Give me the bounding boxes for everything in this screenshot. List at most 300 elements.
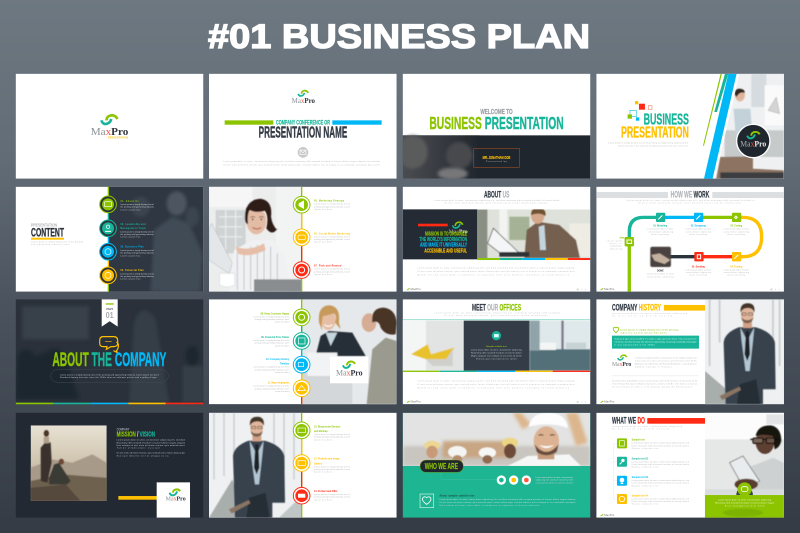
labels: 05. Sending [692, 266, 705, 268]
heading: MISSION / VISION [117, 432, 155, 439]
item 3: the printing and typesetting industry [120, 252, 154, 255]
item 12: Lorem ipsum is simply dummy text of [314, 433, 350, 436]
item 13: Ipsum has been [314, 472, 332, 474]
photo: woman [209, 187, 302, 292]
item 1: Lorem ipsum has [120, 208, 140, 211]
body text: Nonummy nibh euismod tincidunt ut laoreet dolore magna aliquam [117, 441, 185, 444]
service 1: Lorem ipsum dolor sit amet, consectetuer adipiscing elit, sed [632, 442, 689, 445]
item 6: Lorem ipsum is simply dummy text of [314, 235, 350, 238]
photo [713, 74, 784, 179]
icon: speech bubbles [100, 337, 118, 353]
item 4 [120, 269, 154, 281]
labels: consectetuer [610, 245, 623, 248]
labels: 04. Testing [730, 265, 743, 268]
labels: Lorem ipsum dolor sit amet [724, 268, 749, 271]
presenter box: MR. JONATHAN DOE [483, 155, 510, 160]
intro text: Ut wisi enim ad minim veniam, quis nostrud exerci tation ullamcorper [444, 314, 548, 317]
intro text [612, 312, 687, 317]
photo: hikers [31, 425, 107, 501]
item 3: Lorem ipsum is simply dummy text of [120, 249, 154, 252]
process path [629, 217, 762, 292]
labels: diam nonummy [727, 275, 745, 277]
logo badge [737, 124, 770, 158]
item 14: Lorem ipsum is simply dummy text of [314, 493, 350, 496]
logo text: Sydney College in Virginia [635, 365, 673, 368]
item 6: Ipsum has been [314, 242, 332, 244]
presenter box: Presented by [486, 160, 507, 163]
divider text: Of de Finibus Bonorum et Malorum by Cicero, written in 45 BC. This book is a treatise [612, 383, 698, 386]
footer [600, 400, 615, 404]
body text: Autem vel eum iriure dolor in hendrerit in vulputate velit esse molestie consequat vel illum dolore eu [417, 273, 569, 276]
item 14: 14. Contact and Offer [314, 490, 338, 493]
intro text: Ut wisi enim ad minim veniam [612, 314, 672, 317]
labels: 01. Modeling [653, 226, 668, 228]
item 4: the printing and typesetting industry [120, 275, 154, 278]
highlight text [620, 328, 679, 334]
footer: MaxPro [411, 287, 421, 291]
item 11: Lorem ipsum is simply dummy text of the [253, 385, 290, 388]
subtitle: COMPANY CONFERENCE OR [276, 121, 330, 127]
labels: adipiscing [610, 248, 622, 250]
item 12 [314, 426, 350, 441]
item 2: the printing and typesetting industry [120, 233, 154, 236]
labels: Lorem ipsum [606, 239, 623, 242]
item 14 [314, 490, 350, 501]
service 2: Diam nonummy nibh euismod tincidunt ut laoreet dolore [632, 463, 690, 466]
item 4: 04. Financial Plan [120, 269, 144, 272]
labels: Lorem ipsum dolor sit amet [686, 268, 711, 271]
item 2: Lorem ipsum is simply dummy text of [120, 230, 154, 233]
teal box: It was popularised in the 1960s [615, 343, 655, 346]
about text: Lorem ipsum dolor sit amet, consectetuer adipiscing elit, sed diam nonummy nibh euismod tincidunt ut laoreet dolore magna aliquam [439, 498, 576, 501]
header bars [596, 192, 784, 198]
service 2: Magna aliquam erat [632, 466, 659, 469]
item 3: Lorem ipsum has [120, 254, 140, 257]
item 13: Lorem ipsum is simply dummy text of [314, 465, 350, 468]
pill text: Lorem ipsum is simply dummy text of the printing and typesetting industry. Lorem ipsum has been [60, 373, 159, 376]
body text: Lorem ipsum dolor sit amet, consectetuer adipiscing elit, sed diam nonummy nibh euismod tincidunt ut laoreet dolore magna aliquam [417, 380, 575, 383]
green bar [225, 120, 273, 125]
photo: construction team [403, 413, 590, 466]
icon: mail [298, 147, 308, 158]
teal box: Centuries, but also the leap into electronic typesetting, remaining essentially unchanged [615, 340, 696, 343]
photo: businessman [705, 299, 784, 404]
dark meeting photo [16, 306, 203, 403]
item 5: printing and typesetting industry. Lorem [314, 205, 350, 208]
labels: 02. Designing [691, 226, 706, 228]
body text [608, 142, 688, 147]
heading: WHAT WE DO [612, 416, 645, 426]
item 3: 03. Business Plan [120, 247, 144, 249]
dark photo panel [108, 187, 203, 292]
footer [407, 400, 586, 404]
timeline [293, 299, 310, 404]
intro text [626, 199, 755, 204]
item 14: printing and typesetting industry. Lorem [314, 496, 350, 499]
main heading: BUSINESS PRESENTATION [429, 113, 564, 133]
highlight text: industry, Lorem Ipsum has been [620, 331, 667, 334]
timeline [293, 413, 310, 518]
item 11 [253, 383, 290, 393]
who we are pill: WHO WE ARE [425, 461, 458, 471]
body text: Ipsum has been the industry standard dummy text ever since the [618, 144, 689, 147]
item 5: Lorem ipsum is simply dummy text of [314, 203, 350, 206]
item 1: the printing and typesetting industry [120, 206, 154, 209]
service 1 [617, 438, 690, 450]
item 7: Lorem ipsum is simply dummy text of [314, 268, 350, 271]
slide 8: how we work [596, 187, 784, 292]
item 5 [314, 200, 350, 211]
item 8: printing and typesetting industry. Lorem [255, 318, 290, 321]
item 10: Timeline [280, 364, 290, 366]
intro text [434, 199, 560, 204]
intro text: Lorem ipsum dolor sit amet, consectetuer adipiscing elit, sed diam nonummy nibh euismod [434, 312, 559, 315]
slide 5: content [16, 187, 203, 292]
about text [439, 494, 576, 507]
service 4: Magna aliquam erat [632, 503, 659, 506]
intro text: Ut wisi enim ad minim veniam, quis nostrud exerci tation ullamcorper [638, 201, 742, 204]
icon: heart [613, 327, 619, 333]
intro text: Lorem ipsum dolor sit amet, consectetuer adipiscing [612, 425, 682, 428]
service 2 [617, 457, 690, 469]
item 3 [120, 247, 154, 257]
about text: Duis autem vel eum iriure dolor in hendrerit in vulputate velit esse molestie [439, 504, 540, 507]
body text: Ut wisi enim ad minim veniam, quis nostrud exerci tation ullamcorper [117, 451, 185, 454]
body text: Lorem ipsum dolor sit amet, consectetuer adipiscing elit, sed diam nonummy nibh euismod tincidunt ut laoreet dolore magna aliquam [417, 267, 575, 270]
intro text [434, 312, 559, 317]
item 12: 12. Responsive Devices [314, 426, 341, 428]
photo: office [530, 321, 590, 371]
office info panel: Veniam quis nostrud exerci tation [476, 357, 517, 360]
item 5: Ipsum has been [314, 209, 332, 211]
labels: Lorem ipsum dolor sit amet [686, 228, 711, 231]
service 3: Diam nonummy nibh euismod tincidunt ut laoreet dolore [632, 482, 690, 485]
photo: man at laptop [477, 208, 590, 259]
item 13: Gallery [314, 463, 323, 465]
footer [407, 287, 586, 291]
green panel: Lorem ipsum dolor sit amet, consectetuer adipiscing [718, 499, 771, 502]
item 8: Lorem ipsum is simply dummy text of the [253, 315, 290, 318]
office info panel: Lorem ipsum dolor sit amet, consectetuer adipiscing [471, 348, 522, 351]
item 2 [120, 224, 154, 239]
logo [292, 91, 316, 105]
item 2: Management Team [120, 227, 146, 230]
body text: Suscipit lobortis nisl ut aliquip ex ea [117, 454, 169, 457]
logo: PRESENTATION [108, 136, 128, 139]
labels: dolor sit [610, 242, 623, 245]
logo text [635, 356, 697, 368]
body text: Ut wisi enim ad minim veniam, quis nostrud exerci tation ullamcorper suscipit lobortis nisl ut aliquip ex ea commodo consequat duis [417, 383, 575, 386]
intro text: Lorem ipsum dolor sit amet, consectetuer adipiscing elit, sed diam nonummy nibh euismod tincidunt ut laoreet dolore [434, 199, 560, 202]
timeline [100, 187, 116, 292]
slide 2: presentation name [209, 74, 397, 179]
office info panel: Nonummy nibh euismod tincidunt ut laoreet dolore [471, 351, 523, 354]
logo [612, 355, 631, 368]
red bar [647, 418, 723, 424]
service 3: Magna aliquam erat [632, 484, 659, 487]
logo [91, 115, 129, 139]
office info panel: Sample subtitle text [486, 345, 507, 348]
logo card: MaxPro [166, 496, 186, 503]
item 1: Lorem ipsum is simply dummy text of [120, 203, 154, 206]
labels: consectetuer adipiscing [724, 271, 749, 274]
slide 1: logo cover [16, 74, 203, 179]
item 13: printing and typesetting industry. Lorem [314, 468, 350, 471]
presentation name: PRESENTATION NAME [259, 124, 347, 141]
service 3: Lorem ipsum dolor sit amet, consectetuer adipiscing elit, sed [632, 479, 689, 482]
green panel: Nonummy nibh euismod tincidunt ut laoreet dolore magna [715, 502, 775, 505]
item 8 [253, 312, 290, 324]
logo text: It has roots in a piece of classical Latin literature from 45 BC [635, 359, 697, 362]
teal box [612, 336, 699, 349]
labels: Lorem ipsum dolor sit amet [648, 228, 673, 231]
photo: businessman [209, 413, 302, 518]
body text [224, 160, 380, 166]
item 9: 09. Financial Price Tables [261, 337, 290, 339]
heading: COMPANY HISTORY [612, 303, 661, 313]
footer: ◎ ‹ › [577, 287, 586, 291]
side text: adipiscing elit, sed diam nonummy nibh [536, 479, 573, 482]
ribbon: PART [106, 307, 113, 311]
slide 12: businessman with timeline [209, 413, 397, 518]
footer: MaxPro [604, 513, 615, 517]
service 1: Sample text [632, 439, 645, 442]
about text: Ut wisi enim ad minim veniam, quis nostrud exerci tation ullamcorper suscipit lobortis nisl ut aliquip ex ea commodo consequat [439, 501, 576, 504]
item 11: 11. Map Infographic [268, 383, 290, 385]
mission panel: ACCESSIBLE AND USEFUL [424, 248, 467, 254]
service 3: Sample text 03 [632, 476, 649, 479]
labels: consectetuer adipiscing [686, 271, 711, 274]
service 2: Sample text 02 [632, 457, 649, 460]
timeline [293, 187, 310, 292]
mission panel [403, 209, 477, 259]
intro text: Lorem ipsum dolor sit amet, consectetuer adipiscing elit, sed diam nonummy nibh euismod tincidunt ut [626, 199, 755, 202]
heading: ABOUT US [484, 190, 509, 200]
labels: consectetuer adipiscing [724, 230, 749, 233]
colour strip [16, 403, 203, 405]
side text: euismod tincidunt ut laoreet dolore [536, 481, 574, 484]
ribbon [102, 299, 118, 327]
item 9: printing and typesetting industry. Lorem [255, 342, 290, 345]
yellow rule [31, 238, 64, 240]
slide 6: woman with timeline [209, 187, 397, 292]
slide 3: welcome [398, 74, 590, 180]
service 4 [617, 494, 690, 506]
colour strip [403, 371, 590, 372]
colour strip [477, 258, 590, 260]
item 10 [253, 358, 290, 374]
yellow bar [664, 305, 723, 311]
logo: MaxPro [612, 362, 631, 368]
item 2: 02. Leadership and [120, 224, 146, 226]
presenter box [474, 148, 519, 167]
item 4: Lorem ipsum is simply dummy text of [120, 272, 154, 275]
heart box [420, 494, 434, 508]
heading 2: PRESENTATION [621, 125, 689, 142]
logo card [330, 357, 368, 383]
item 10: Lorem ipsum is simply dummy text of the [253, 366, 290, 369]
labels: consectetuer adipiscing [686, 230, 711, 233]
body text: Erat volutpat ut wisi enim ad minim veniam, quis nostrud exerci [117, 444, 186, 447]
labels: consectetuer adipiscing [648, 230, 673, 233]
ribbon: 01 [106, 311, 114, 320]
item 13: 13. Portfolio and Image [314, 458, 340, 461]
slide 15: who we are [403, 413, 590, 518]
item 6 [314, 232, 351, 244]
green panel: Erat volutpat ut wisi enim [725, 505, 765, 508]
item 1 [120, 200, 154, 211]
title: #01 BUSINESS PLAN [208, 18, 590, 56]
item 10: Ipsum has been [275, 372, 289, 374]
slide 14: company history [596, 299, 784, 404]
body text: Ut wisi enim ad minim veniam, quis nostrud exerci tation ullamcorper suscipit lobortis nisl ut aliquip ex ea commodo consequat duis autem [223, 163, 380, 166]
photo: lobby [403, 321, 464, 371]
body text [117, 439, 186, 457]
labels: Lorem ipsum dolor sit amet [724, 228, 749, 231]
body text: Tation ullamcorper suscipit [117, 447, 160, 450]
divider text: On the theory of ethics, very popular during the Renaissance [612, 386, 693, 389]
item 10: 10. Company History [266, 358, 290, 361]
heading: COMPANY [117, 428, 130, 432]
labels: Idea [620, 237, 625, 239]
labels: DONE [657, 271, 664, 273]
item 11: Ipsum has been [275, 391, 289, 393]
presentation heading: PRESENTATION [31, 223, 57, 229]
slide 10: meeting with timeline [209, 299, 397, 404]
item 12: and Mockup [314, 431, 328, 433]
body text [417, 380, 575, 389]
logo text: Making it over 2000 years old, Richard McClintock, a Latin professor [635, 362, 697, 365]
body text: Lorem ipsum dolor sit amet, consectetuer adipiscing elit, sed diam nonummy nibh euismod tincidunt ut laoreet dolore magna aliquam erat volutpat [223, 160, 380, 163]
heading: ABOUT THE COMPANY [52, 350, 167, 371]
item 12: Ipsum has been [314, 439, 332, 441]
process nodes [625, 213, 741, 261]
body text [417, 267, 575, 276]
who we are pill [420, 460, 463, 472]
welcome heading: WELCOME TO [480, 107, 513, 116]
heading: BUSINESS [644, 111, 689, 128]
footer [600, 287, 780, 291]
item 6: 06. Social Media Marketing [314, 232, 351, 235]
item 10: printing and typesetting industry. Lorem [255, 368, 290, 371]
item 7: 07. Risk and Reward [314, 266, 342, 268]
intro text: Ut wisi enim ad minim veniam, quis nostrud exerci tation ullamcorper suscipit [444, 201, 548, 204]
intro text: Lorem ipsum dolor sit amet, consectetuer adipiscing [612, 312, 687, 315]
mission panel: THE WORLD'S INFORMATION [419, 237, 467, 243]
service 1: Diam nonummy nibh euismod tincidunt ut laoreet dolore [632, 444, 690, 447]
heading: MEET OUR OFFICES [472, 303, 521, 313]
item 4: Lorem ipsum has [120, 278, 140, 281]
divider text [612, 376, 699, 389]
pill text [51, 370, 168, 382]
item 8: 08. Keep Customer Happy [260, 312, 290, 315]
side text [536, 476, 574, 484]
labels: 03. Coding [730, 226, 743, 228]
photo: man with tablet [705, 413, 784, 495]
body text: and typesetting industry lorem [31, 243, 70, 246]
office info panel: Magna aliquam erat volutpat ut wisi enim ad minim [471, 354, 522, 357]
slide 13: meet our offices [403, 299, 590, 404]
service 4: Sample text 04 [632, 494, 649, 497]
labels: diam nonummy [689, 234, 707, 236]
yellow bar [118, 496, 163, 500]
decorative squares [628, 101, 652, 121]
body text: Lorem ipsum dolor sit amet, consectetuer adipiscing elit, sed diam [117, 439, 185, 442]
content heading: CONTENT [31, 226, 64, 240]
body text: Autem vel eum iriure dolor in hendrerit in vulputate velit esse molestie consequat vel illum dolore eu [417, 386, 569, 389]
service 2: Lorem ipsum dolor sit amet, consectetuer adipiscing elit, sed [632, 460, 689, 463]
item 6: printing and typesetting industry. Lorem [314, 238, 350, 241]
item 5: 05. Marketing Strategy [314, 200, 345, 203]
heading: HOW WE WORK [671, 190, 710, 200]
item 11: printing and typesetting industry. Lorem [255, 387, 290, 390]
footer: MaxPro [604, 287, 615, 291]
labels: diam nonummy [651, 234, 669, 236]
about text: About sample subtitle text [439, 494, 475, 497]
item 9: Lorem ipsum is simply dummy text of the [253, 339, 290, 342]
mission panel: MISSION IS TO ORGANIZE [425, 231, 467, 237]
blue bar [332, 120, 382, 125]
item 1: 01. About Us [120, 200, 139, 203]
item 12: printing and typesetting industry. Lorem [314, 436, 350, 439]
footer: ◎ ‹ › [770, 287, 780, 291]
teal rule [403, 318, 590, 321]
footer: ◎ ‹ › [577, 400, 586, 404]
logo card [157, 482, 190, 518]
diagonal stripes [703, 74, 737, 179]
service 4: Lorem ipsum dolor sit amet, consectetuer adipiscing elit, sed [632, 497, 689, 500]
labels: diam nonummy [727, 234, 745, 236]
service 3 [617, 476, 690, 487]
item 7: printing and typesetting industry. Lorem [314, 270, 350, 273]
icon: chat badge [736, 482, 753, 496]
dark photo band [398, 135, 590, 180]
footer [600, 513, 615, 517]
item 9 [253, 337, 290, 347]
item 7 [314, 266, 350, 276]
icon circles [441, 473, 531, 485]
item 14: Ipsum has been [314, 499, 332, 501]
footer: MaxPro [604, 400, 615, 404]
photo: meeting [302, 299, 397, 404]
item 13 [314, 458, 350, 474]
heading [117, 428, 155, 439]
slide 9: about the company [16, 299, 203, 405]
logo text: Contrary to popular belief, Lorem Ipsum is not simply random text [635, 356, 697, 359]
service 4: Diam nonummy nibh euismod tincidunt ut laoreet dolore [632, 500, 690, 503]
footer: MaxPro [411, 400, 421, 404]
office info panel [464, 321, 530, 371]
mission panel: MaxPro [449, 229, 468, 235]
item 7: Ipsum has been [314, 274, 332, 276]
service 1: Magna aliquam erat [632, 447, 659, 450]
highlight text: Lorem ipsum is simply dummy text of the printing [620, 328, 679, 331]
item 8: Ipsum has been [275, 322, 289, 324]
item 2: Lorem ipsum has [120, 236, 140, 239]
slide 7: about us [403, 187, 590, 292]
body text: Ut wisi enim ad minim veniam, quis nostrud exerci tation ullamcorper suscipit lobortis nisl ut aliquip ex ea commodo consequat duis [417, 270, 575, 273]
logo badge: MaxPro [740, 140, 766, 149]
body text [31, 241, 83, 246]
logo: MaxPro [91, 126, 129, 138]
side text: Lorem ipsum dolor sit amet, consectetuer [536, 476, 573, 479]
logo: MaxPro [292, 98, 316, 105]
slide 4: business presentation [596, 74, 784, 179]
slide 11: mission and vision [16, 413, 203, 518]
intro text [612, 425, 682, 430]
slide 16: what we do [596, 413, 784, 518]
item 9: Ipsum has been [275, 345, 289, 347]
